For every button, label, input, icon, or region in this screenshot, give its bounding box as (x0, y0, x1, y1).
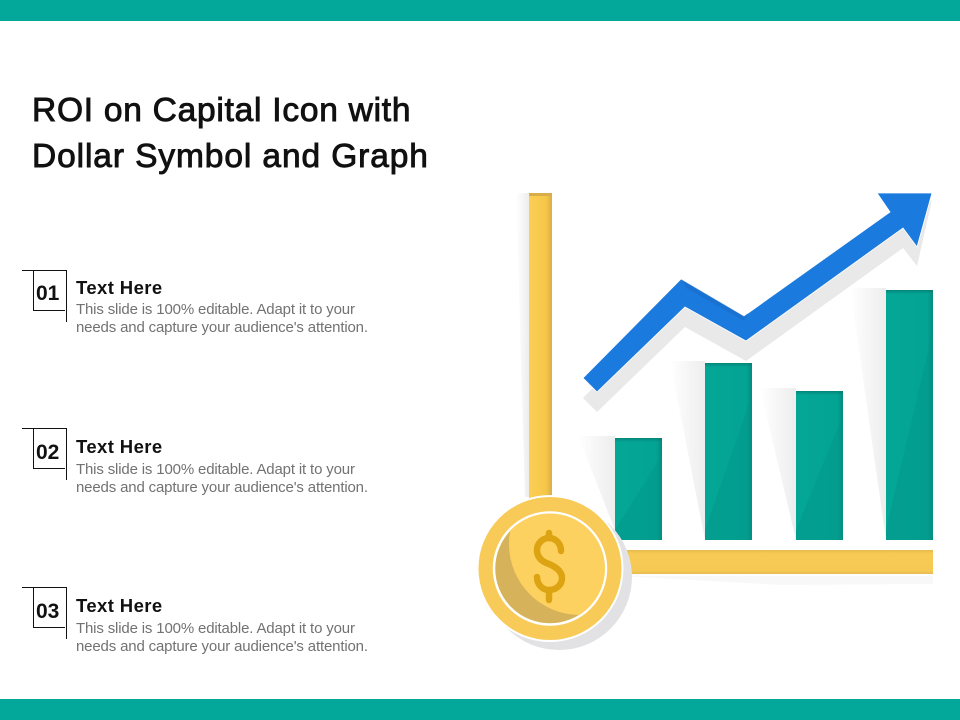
text 01: needs and capture your audience's attention. (76, 319, 368, 336)
heading 01: Text Here (76, 277, 163, 298)
axis shadows (516, 193, 933, 585)
coin shadow (486, 504, 632, 650)
icon: dollar sign (537, 533, 562, 600)
number 02: 02 (36, 441, 59, 464)
number 03: 03 (36, 600, 59, 623)
item 02 (22, 428, 368, 496)
chart icon (478, 193, 933, 650)
arrow shadow (583, 200, 932, 412)
title: Dollar Symbol and Graph (32, 138, 429, 175)
text 02 (76, 461, 368, 496)
number box 02 (22, 428, 67, 480)
vertical axis (529, 193, 552, 499)
bar shadows (578, 288, 886, 540)
text 03: This slide is 100% editable. Adapt it to your (76, 620, 355, 637)
heading 03: Text Here (76, 595, 163, 616)
bar 3 (796, 391, 843, 540)
text 03: needs and capture your audience's attention. (76, 638, 368, 655)
text 02: needs and capture your audience's attention. (76, 479, 368, 496)
title (32, 92, 429, 175)
top band (0, 0, 960, 21)
coin (478, 495, 632, 650)
text 01: This slide is 100% editable. Adapt it to your (76, 301, 355, 318)
bar 2 (705, 363, 752, 540)
heading 02: Text Here (76, 436, 163, 457)
text 02: This slide is 100% editable. Adapt it to your (76, 461, 355, 478)
bar 4 (886, 290, 933, 540)
bottom band (0, 699, 960, 720)
arrow (583, 193, 932, 392)
bar 1 (615, 438, 662, 540)
item 03 (22, 587, 368, 655)
horizontal axis (610, 550, 933, 574)
item 01 (22, 270, 368, 336)
coin crescent (509, 514, 605, 615)
title: ROI on Capital Icon with (32, 92, 411, 129)
number box 03 (22, 587, 67, 639)
coin rim (478, 496, 622, 641)
text 03 (76, 620, 368, 655)
number 01: 01 (36, 282, 59, 305)
number box 01 (22, 270, 67, 322)
text 01 (76, 301, 368, 336)
coin face (494, 512, 606, 624)
